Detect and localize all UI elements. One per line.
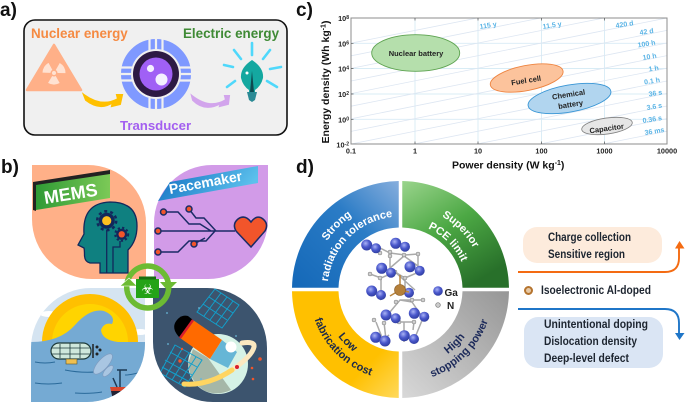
time labels: 42 d (639, 28, 654, 37)
time labels: 36 ms (644, 127, 665, 137)
x axis title: Power density (W kg (452, 160, 555, 172)
segment: PCE limit: PCE limit (428, 222, 468, 262)
time labels: 1 h (648, 65, 659, 73)
time labels: 100 h (637, 40, 656, 49)
ellipse: chemical battery (526, 78, 613, 119)
icon: airship (51, 343, 102, 364)
time labels: 0.36 s (642, 115, 663, 125)
y tick labels: 8 (346, 15, 349, 21)
y axis title: Energy density (Wh kg (320, 30, 332, 143)
icon: recycling battery (120, 266, 177, 308)
petal: pacemaker (154, 165, 268, 279)
y tick labels: 10 (338, 14, 346, 23)
heading: nuclear energy: Nuclear energy (31, 26, 128, 41)
ellipse: capacitor (581, 115, 633, 137)
segment: fabrication cost (292, 291, 399, 398)
box: charge collection: Charge collection (548, 232, 631, 244)
time labels: 115 y (479, 21, 497, 31)
y tick labels: 4 (346, 66, 349, 72)
satellite body (174, 316, 237, 368)
ellipse: fuel cell (488, 59, 565, 97)
segment: radiation tolerance: radiation tolerance (322, 211, 392, 281)
time labels: 3.6 s (646, 103, 663, 112)
x tick labels: 0.1 (346, 146, 356, 156)
y tick labels: 0 (346, 116, 349, 122)
heading: transducer: Transducer (120, 118, 191, 133)
time labels: 11.5 y (542, 21, 562, 31)
arrow: purple curved (192, 96, 229, 107)
ellipse: chemical battery: battery (558, 98, 584, 111)
dopant label: Isoelectronic Al-doped (541, 285, 651, 297)
x tick labels: 100 (535, 146, 548, 156)
legend: Ga (433, 286, 458, 299)
legend: N: N (447, 301, 454, 312)
time labels: 0.1 h (644, 77, 661, 86)
ellipse: nuclear battery (372, 35, 460, 71)
x tick labels: 10000 (657, 146, 677, 156)
box: charge collection (523, 227, 662, 263)
box: defects (524, 317, 663, 368)
panel label a: a) (0, 0, 17, 21)
chart: Ragone plot (320, 15, 677, 170)
pacemaker sign: Pacemaker (168, 168, 244, 197)
time labels: 36 s (648, 89, 663, 98)
ellipse: capacitor: Capacitor (589, 122, 624, 135)
icon: transducer ring (120, 38, 192, 110)
panel d: donut advantages (292, 181, 509, 398)
x tick labels: 1000 (596, 146, 613, 156)
y tick labels: 6 (346, 40, 349, 46)
panel label c: c) (296, 0, 313, 21)
y tick labels (336, 14, 349, 150)
panel b: applications (31, 165, 268, 402)
planet ring (184, 342, 254, 384)
y tick labels: 10 (338, 116, 346, 124)
panel label d: d) (296, 157, 314, 178)
y axis title: -1 (320, 24, 328, 30)
y tick labels: 10 (338, 64, 346, 74)
y tick labels: 10 (336, 140, 345, 150)
icon: boat with sonar (93, 354, 127, 396)
segment: stopping power: High (444, 334, 465, 354)
box: defects: Deep-level defect (544, 353, 629, 365)
y axis title: ) (320, 21, 332, 24)
segment: radiation tolerance: Strong (322, 212, 352, 240)
x tick labels: 10 (474, 146, 482, 156)
ellipse: chemical battery: Chemical (551, 87, 586, 102)
petal: satellite (153, 288, 267, 402)
y tick labels: -2 (345, 142, 349, 148)
box: charge collection: Sensitive region (548, 249, 625, 261)
y tick labels: 10 (338, 90, 346, 99)
x tick labels: 1 (413, 146, 417, 156)
box: defects: Unintentional doping (544, 319, 648, 331)
segment: fabrication cost: fabrication cost (314, 317, 372, 376)
MEMS sign: MEMS (42, 180, 99, 208)
y tick labels: 2 (346, 91, 349, 97)
ellipse: fuel cell: Fuel cell (511, 74, 542, 87)
petal: MEMS (32, 165, 146, 279)
arrow: orange up (518, 241, 684, 272)
icon: head with gears (78, 202, 137, 273)
crystal structure (361, 238, 429, 346)
arrow: blue down (518, 309, 684, 340)
segment: stopping power (402, 291, 509, 398)
icon: leaf light bulb (224, 43, 281, 102)
petal: ocean airship (31, 288, 148, 402)
icon: recycling battery: ☣ (141, 282, 154, 298)
satellite solar panels (160, 289, 239, 387)
time labels: 420 d (615, 20, 634, 30)
time labels (479, 20, 665, 137)
y tick labels: 10 (338, 40, 346, 48)
legend: N (436, 301, 454, 312)
x axis title: -1 (555, 160, 561, 167)
time labels: 10 h (642, 53, 657, 62)
panel a: energy conversion (24, 20, 287, 135)
segment: PCE limit: Superior (443, 211, 478, 246)
ellipse: nuclear battery: Nuclear battery (389, 49, 444, 58)
x axis title: ) (561, 160, 564, 172)
x tick labels (346, 146, 677, 156)
arrow: yellow curved (84, 95, 122, 106)
segment: fabrication cost: Low (338, 332, 358, 351)
segment: stopping power: stopping power (430, 318, 488, 376)
box: defects: Dislocation density (544, 336, 638, 348)
icon: radiation triangle (27, 45, 81, 90)
heading: electric energy: Electric energy (183, 26, 280, 41)
legend: Ga: Ga (444, 288, 458, 299)
segment: radiation tolerance (292, 181, 399, 288)
segment: PCE limit (402, 181, 509, 288)
panel label b: b) (1, 157, 19, 178)
icon: circuit heart (155, 206, 267, 255)
